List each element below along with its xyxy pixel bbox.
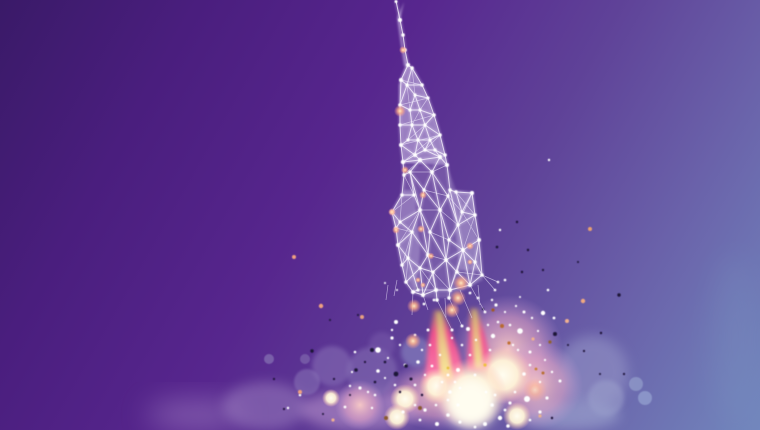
light band at right edge: [711, 255, 759, 425]
mesh nodes: [390, 0, 499, 332]
debris: dark particles: [273, 221, 625, 419]
rocket wireframe: [386, 0, 499, 349]
fine secondary mesh: [386, 68, 498, 330]
debris: white sparks: [287, 159, 562, 428]
blazing light orbs: [322, 346, 547, 430]
rocket exhaust flames: [424, 308, 494, 385]
glowing orange nodes: [388, 46, 474, 349]
bokeh clouds: [147, 332, 652, 430]
debris: orange embers: [292, 227, 592, 422]
mesh lines: [392, 1, 482, 300]
explosion halo: [335, 295, 583, 430]
mesh glow: [392, 1, 482, 300]
rocket hull haze: [392, 2, 483, 298]
